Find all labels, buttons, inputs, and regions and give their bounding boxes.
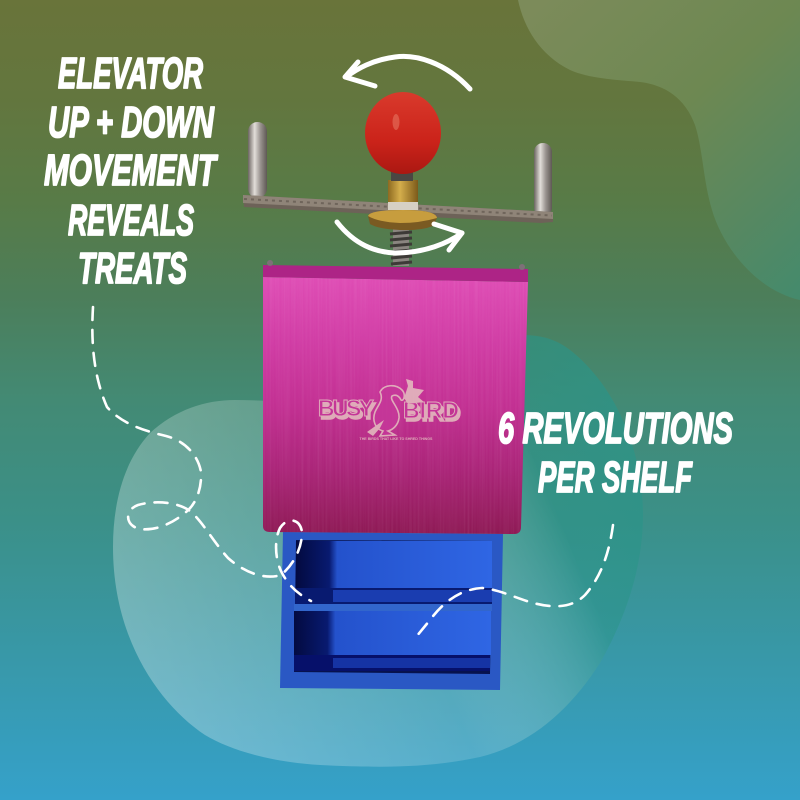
logo: Busy Bird: BIRD [403, 397, 459, 423]
spring [390, 228, 412, 266]
decorative blob: lower centre [113, 335, 643, 767]
brass collar [368, 180, 437, 230]
logo: Busy Bird [318, 379, 461, 441]
arrow: top counter-clockwise [345, 56, 470, 89]
heading: elevator callout: UP + DOWN [48, 98, 215, 147]
plate: pink anodised front [263, 260, 528, 534]
product: treat elevator toy [243, 92, 553, 690]
heading: elevator callout: TREATS [78, 244, 187, 293]
heading: elevator callout: ELEVATOR [58, 49, 203, 98]
ball: red knob [365, 92, 441, 181]
logo: Busy Bird: BIRD [405, 400, 461, 426]
decorative blob: top right [518, 0, 800, 300]
logo: Busy Bird: THE BIRDS THAT LIKE TO SHRED THINGS [360, 437, 433, 441]
dashed path: from revolutions text to drawer [416, 525, 613, 637]
logo: Busy Bird: BUSY [318, 395, 374, 421]
handle: metal crossbar with posts [243, 122, 553, 223]
heading: elevator callout: MOVEMENT [44, 146, 218, 195]
dashed path: from elevator text to drawer [92, 307, 311, 601]
logo: Busy Bird: BUSY [320, 398, 376, 424]
heading: revolutions callout [498, 404, 733, 502]
heading: elevator callout: REVEALS [68, 196, 194, 245]
arrow: bottom clockwise [337, 222, 462, 253]
heading: elevator callout [44, 49, 218, 293]
drawer: blue shelves [280, 532, 503, 690]
heading: revolutions callout: PER SHELF [538, 453, 693, 502]
